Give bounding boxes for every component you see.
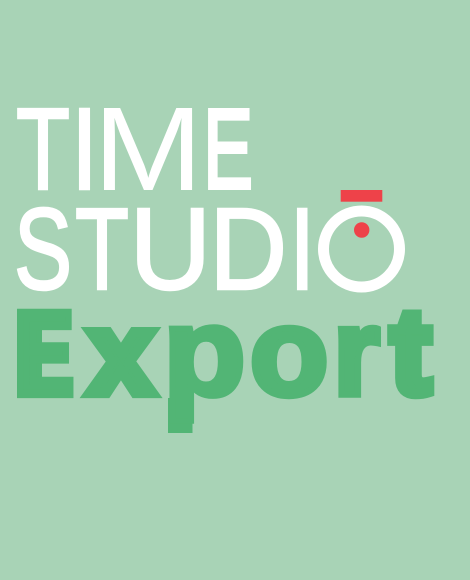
heading: Export: E [14,289,74,420]
heading: Export: t [391,285,431,419]
heading: TIME: M [93,82,203,216]
heading: TIME: E [203,86,253,213]
heading: Export: o [250,283,328,421]
heading: Export: p [163,281,246,422]
heading: STUDIO: S [14,184,72,314]
heading: TIME: I [71,84,98,214]
heading: Export [14,281,431,433]
heading: STUDIO: T [75,184,129,314]
heading: STUDIO: U [130,184,211,314]
heading: STUDIO: O [316,184,407,314]
heading: STUDIO [14,184,407,314]
icon: stopwatch [324,190,400,287]
heading: TIME [16,82,253,216]
heading: STUDIO: I [290,184,315,314]
heading: Export: x [89,288,153,418]
heading: Export: r [333,283,380,421]
heading: TIME: T [16,84,70,214]
heading: STUDIO: D [209,184,287,314]
